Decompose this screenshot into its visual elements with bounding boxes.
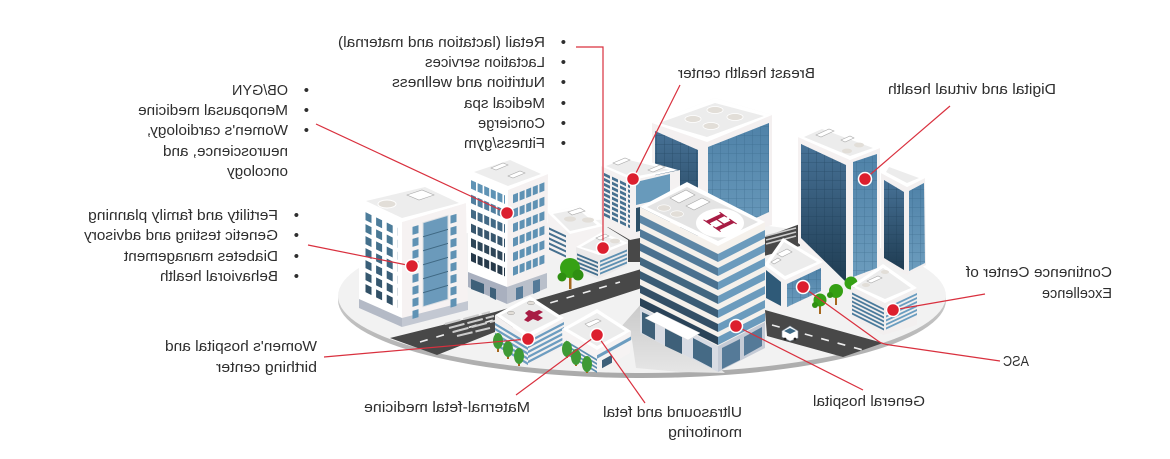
helipad H: H [696, 209, 742, 235]
building: maternal-fetal medicine and ultrasound [562, 309, 631, 372]
label: continence center: Continence Center of [965, 264, 1112, 281]
text: fertility list: Genetic testing and advisory [83, 227, 278, 244]
text: fertility list: • [294, 268, 299, 285]
text: OB/GYN list: neuroscience, and [163, 143, 288, 160]
text: retail list: Retail (lactation and maternal) [338, 34, 545, 51]
text: retail list: Medical spa [463, 95, 545, 112]
vehicle: van on road [782, 326, 798, 341]
callout lines [308, 47, 1000, 403]
text: OB/GYN list: Menopausal medicine [138, 102, 288, 119]
text: OB/GYN list [138, 82, 309, 180]
tree: left large tree [558, 258, 584, 289]
text: fertility list: Fertility and family planning [88, 207, 278, 224]
text: fertility list: • [294, 227, 299, 244]
label: digital and virtual health: Digital and virtual health [888, 81, 1056, 98]
text: fertility list: Behavioral health [160, 268, 278, 285]
building: general hospital [640, 182, 765, 372]
label: ultrasound [603, 404, 742, 441]
building: ASC [764, 238, 823, 312]
label: women's hospital [165, 338, 317, 376]
building: thin tower [881, 163, 926, 275]
label: breast health center: Breast health center [678, 65, 815, 82]
building: front low striped block [576, 232, 628, 279]
ground disk [338, 219, 946, 378]
text: retail list: • [561, 95, 566, 112]
label: women's hospital: Women's hospital and [165, 338, 317, 355]
roads [390, 224, 883, 357]
trees: near ASC [812, 276, 858, 314]
text: OB/GYN list: OB/GYN [232, 82, 288, 99]
text: retail list [338, 34, 566, 152]
building: left office with central glass strip [359, 183, 468, 327]
label: continence center [965, 264, 1112, 302]
label: continence center: Excellence [1042, 285, 1112, 302]
building: women's services tower [468, 156, 548, 304]
text: retail list: • [561, 34, 566, 51]
text: fertility list: • [294, 207, 299, 224]
label: women's hospital: birthing center [216, 359, 317, 376]
label: general hospital: General hospital [813, 393, 925, 410]
label: ASC: ASC [1003, 353, 1029, 370]
text: fertility list: Diabetes management [123, 248, 278, 265]
building: back left low block [548, 206, 603, 262]
building: breast health center [601, 155, 680, 240]
text: retail list: Concierge [478, 115, 545, 132]
label: maternal-fetal medicine: Maternal-fetal medicine [364, 399, 530, 416]
building: continence center [851, 264, 917, 335]
building: large back tower [652, 98, 772, 245]
text: retail list: • [561, 54, 566, 71]
text: OB/GYN list: • [304, 102, 309, 119]
text: OB/GYN list: • [304, 82, 309, 99]
building: women's hospital and birthing center [495, 296, 564, 365]
text: retail list: • [561, 135, 566, 152]
text: OB/GYN list: oncology [226, 163, 288, 180]
text: retail list: • [561, 74, 566, 91]
text: OB/GYN list: • [304, 122, 309, 139]
text: fertility list: • [294, 248, 299, 265]
label: ultrasound: Ultrasound and fetal [603, 404, 742, 421]
trees: women's hospital [493, 333, 524, 366]
text: retail list: Lactation services [425, 54, 545, 71]
icon: hospital cross [524, 310, 543, 322]
text: retail list: • [561, 115, 566, 132]
callout dots [406, 172, 900, 346]
text: retail list: Fitness/gym [464, 135, 545, 152]
label: ultrasound: monitoring [668, 424, 742, 441]
text: OB/GYN list: Women's cardiology, [147, 122, 288, 139]
text: retail list: Nutrition and wellness [392, 74, 545, 91]
building: digital and virtual health tower [798, 125, 880, 283]
trees: maternal-fetal [562, 341, 592, 373]
text: fertility list [83, 207, 299, 285]
